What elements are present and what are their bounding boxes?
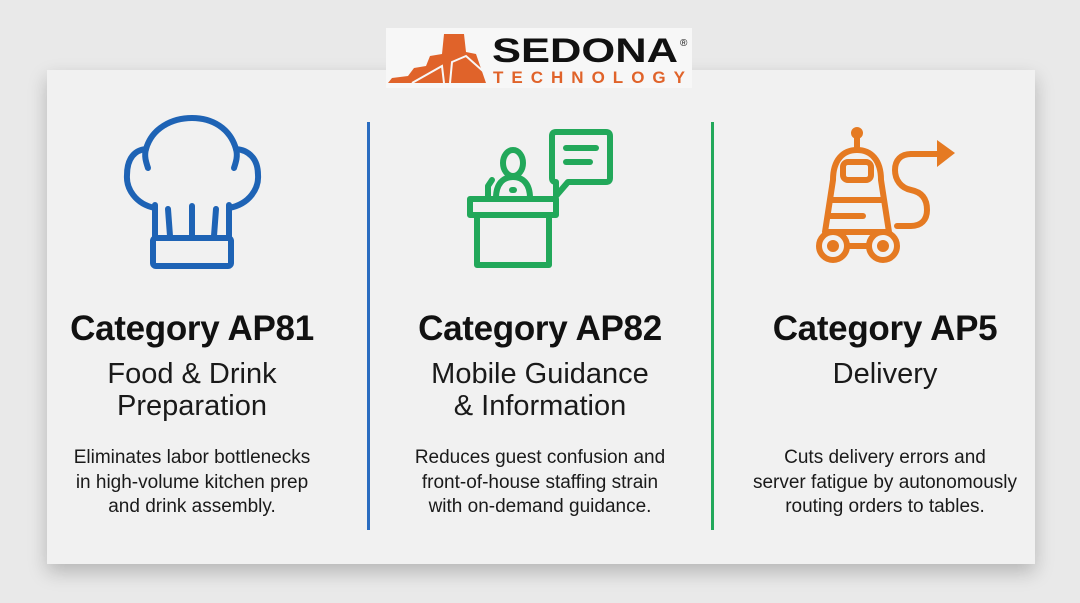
logo: ® bbox=[680, 38, 688, 49]
description: Eliminates labor bottlenecks bbox=[74, 447, 310, 468]
logo: TECHNOLOGY bbox=[493, 68, 686, 87]
description: with on-demand guidance. bbox=[429, 496, 651, 517]
column 3 bbox=[753, 127, 1017, 517]
description bbox=[415, 447, 665, 517]
description bbox=[74, 447, 310, 517]
divider blue bbox=[367, 122, 370, 530]
description: routing orders to tables. bbox=[785, 496, 985, 517]
subtitle: Delivery bbox=[833, 358, 937, 390]
subtitle bbox=[431, 358, 649, 422]
description: in high-volume kitchen prep bbox=[76, 472, 308, 492]
subtitle: & Information bbox=[454, 390, 626, 422]
subtitle: Food & Drink bbox=[107, 358, 277, 390]
description: Cuts delivery errors and bbox=[784, 447, 986, 468]
icon: delivery robot bbox=[816, 127, 955, 263]
subtitle bbox=[107, 358, 277, 422]
title: Category AP5 bbox=[773, 309, 997, 348]
logo bbox=[386, 28, 692, 88]
title: Category AP81 bbox=[70, 309, 314, 348]
card panel bbox=[47, 70, 1035, 564]
subtitle: Preparation bbox=[117, 390, 267, 422]
divider green bbox=[711, 122, 714, 530]
description bbox=[753, 447, 1017, 517]
column 2 bbox=[415, 129, 665, 517]
icon: mountain bbox=[388, 34, 486, 83]
column 1 bbox=[70, 115, 314, 517]
description: front-of-house staffing strain bbox=[422, 472, 658, 492]
subtitle: Mobile Guidance bbox=[431, 358, 649, 390]
description: and drink assembly. bbox=[108, 496, 276, 517]
logo: SEDONA bbox=[492, 32, 678, 70]
icon: chef hat bbox=[124, 115, 262, 269]
description: Reduces guest confusion and bbox=[415, 447, 665, 468]
description: server fatigue by autonomously bbox=[753, 472, 1017, 492]
icon: podium with speaker bbox=[467, 129, 613, 268]
title: Category AP82 bbox=[418, 309, 662, 348]
